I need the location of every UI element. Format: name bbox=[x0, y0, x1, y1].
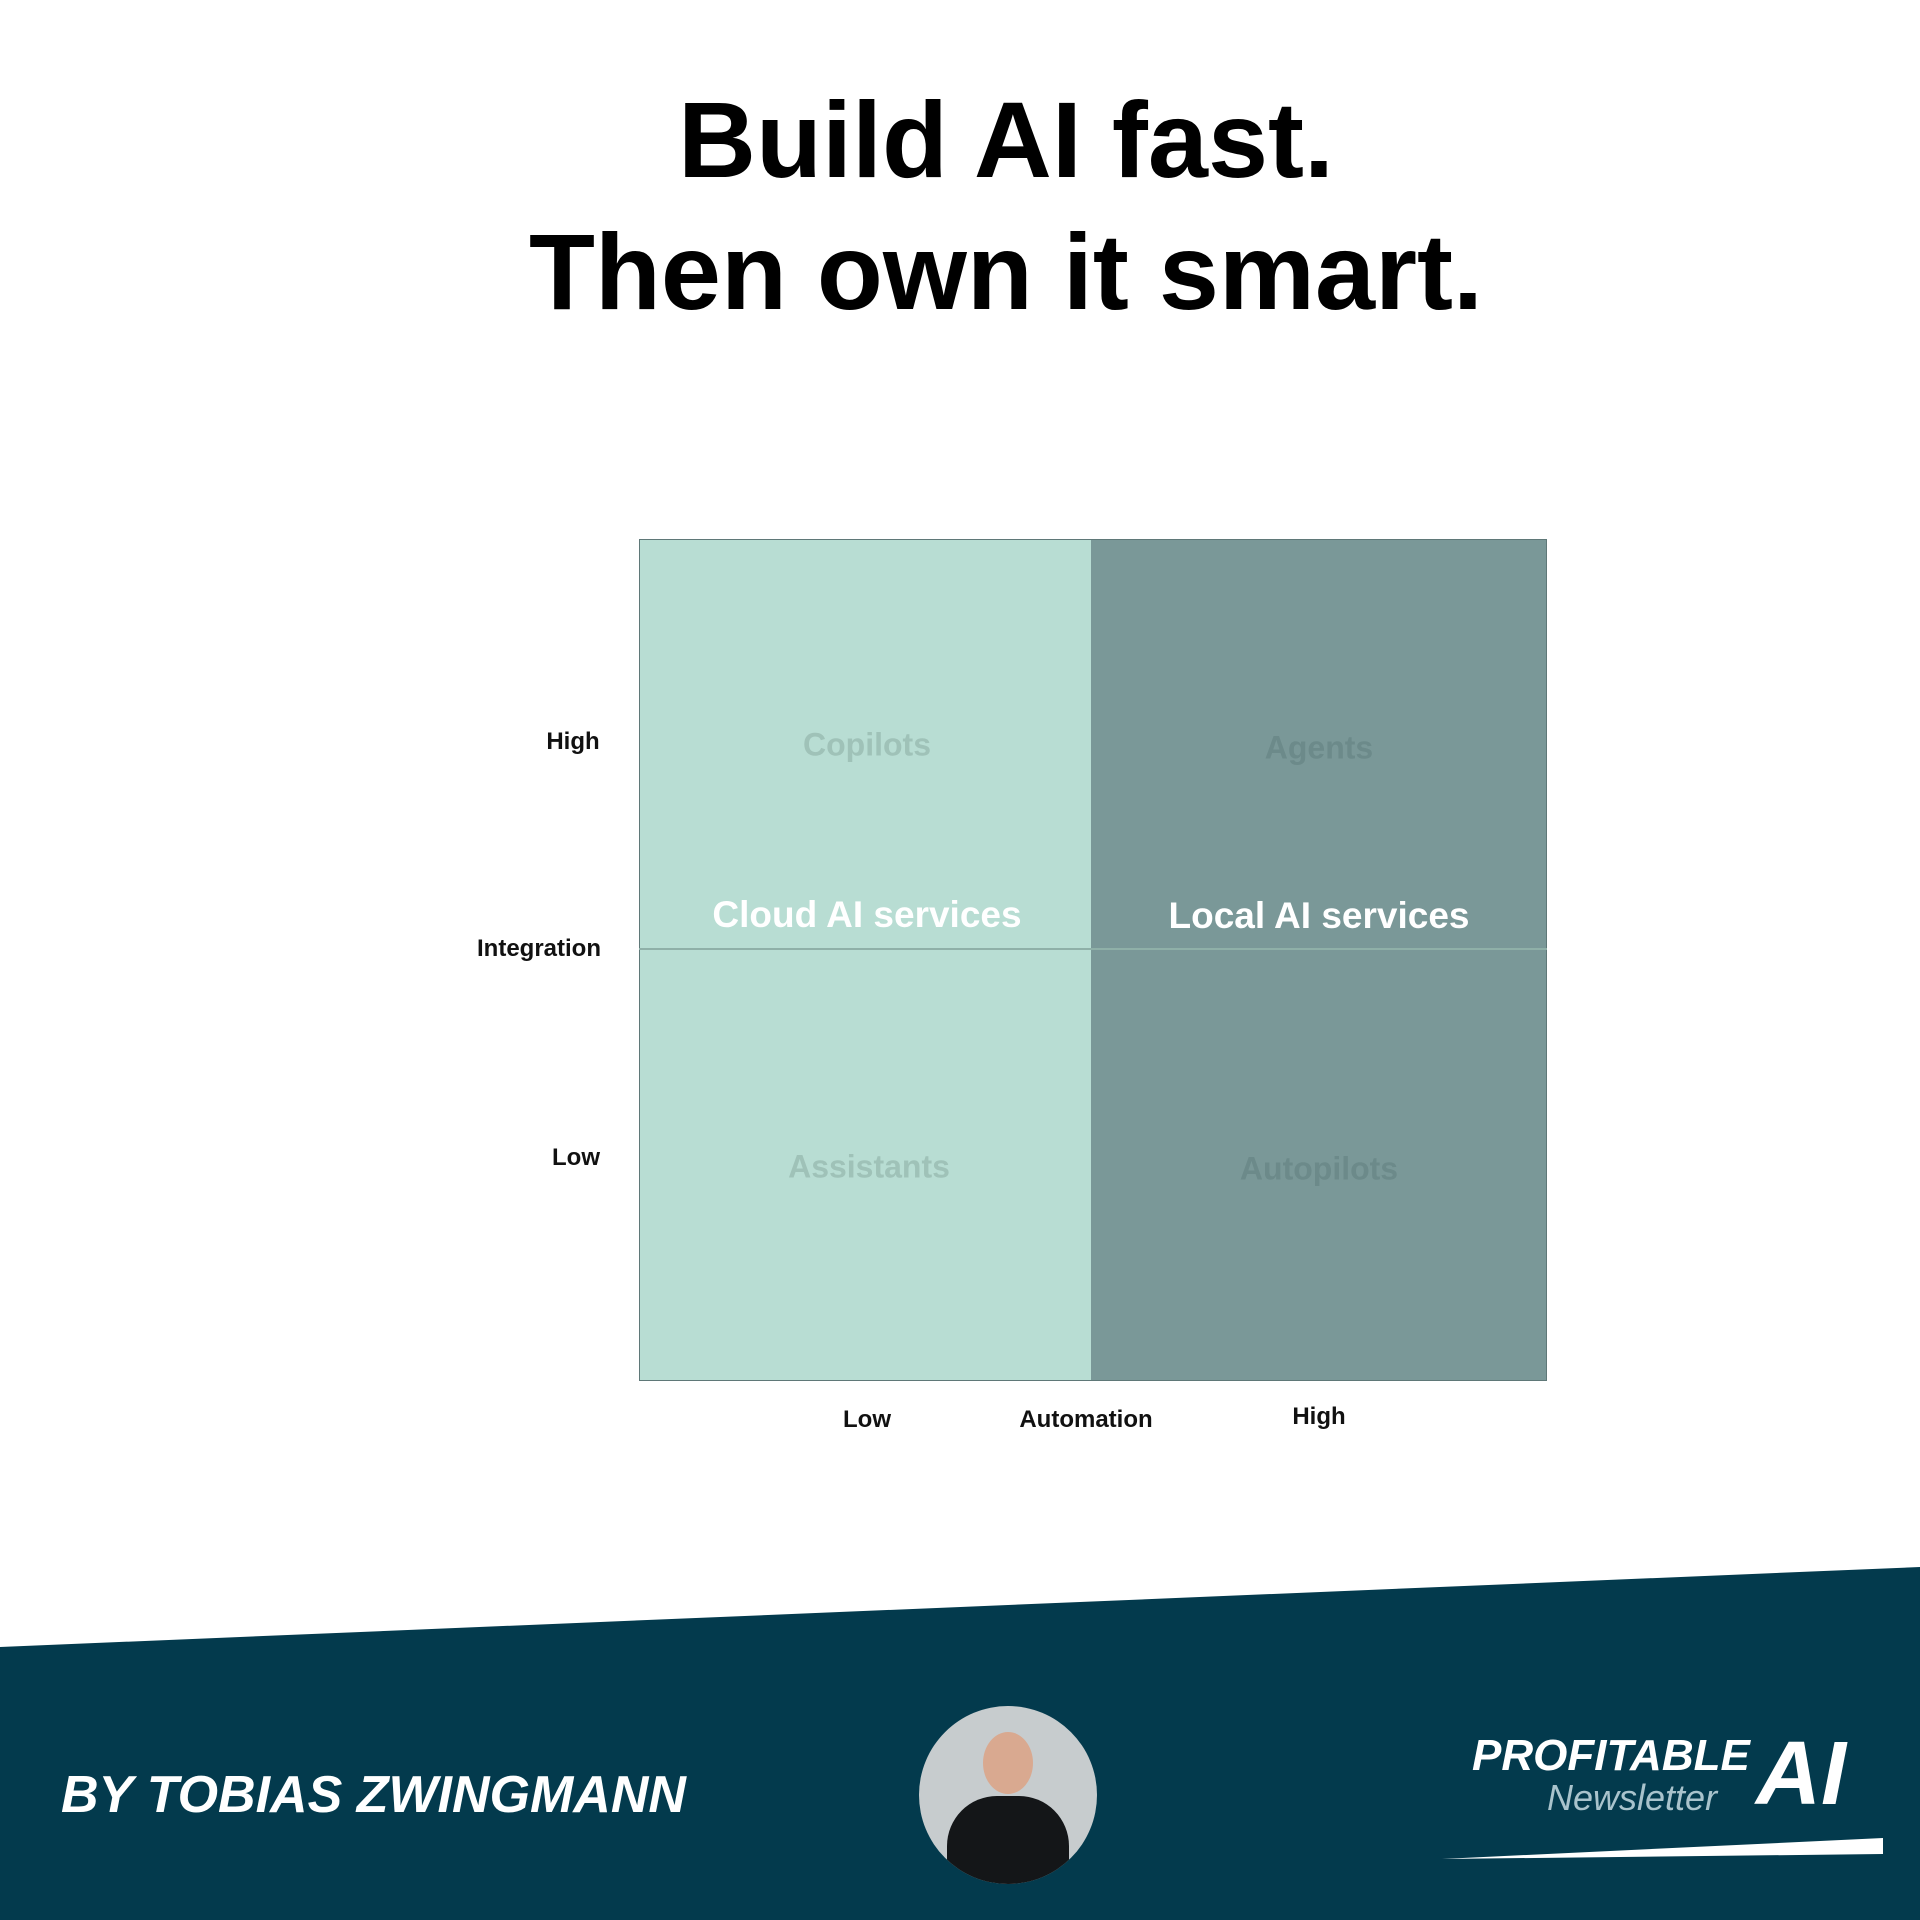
logo: Profitable AI newsletter: Newsletter bbox=[1547, 1777, 1717, 1818]
quadrant: left column bbox=[639, 539, 1091, 1381]
label: Agents: Agents bbox=[1265, 730, 1373, 766]
x label high: High bbox=[1292, 1403, 1346, 1430]
quadrant: right column bbox=[1091, 539, 1547, 1381]
x label automation: Automation bbox=[1019, 1406, 1153, 1433]
logo: Profitable AI newsletter: AI bbox=[1756, 1724, 1846, 1824]
title bbox=[529, 79, 1483, 332]
y label high: High bbox=[546, 728, 600, 755]
label: Copilots: Copilots bbox=[803, 726, 931, 762]
label: Autopilots: Autopilots bbox=[1240, 1150, 1398, 1186]
author byline: BY TOBIAS ZWINGMANN bbox=[61, 1766, 686, 1824]
label: Assistants: Assistants bbox=[788, 1148, 950, 1184]
label: Cloud AI services: Cloud AI services bbox=[712, 894, 1022, 935]
x-axis labels bbox=[843, 1403, 1346, 1433]
y label low: Low bbox=[552, 1144, 600, 1171]
title: Build AI fast. bbox=[678, 79, 1334, 200]
avatar photo bbox=[919, 1706, 1097, 1884]
logo: Profitable AI newsletter: PROFITABLE bbox=[1472, 1731, 1750, 1780]
y-axis labels bbox=[477, 728, 601, 1171]
footer band bbox=[0, 1567, 1920, 1920]
label: Local AI services: Local AI services bbox=[1169, 895, 1469, 936]
title: Then own it smart. bbox=[529, 211, 1483, 332]
y label integration: Integration bbox=[477, 935, 601, 962]
chart: quadrant matrix bbox=[639, 539, 1547, 1381]
logo: Profitable AI newsletter bbox=[1442, 1724, 1883, 1859]
x label low: Low bbox=[843, 1406, 891, 1433]
